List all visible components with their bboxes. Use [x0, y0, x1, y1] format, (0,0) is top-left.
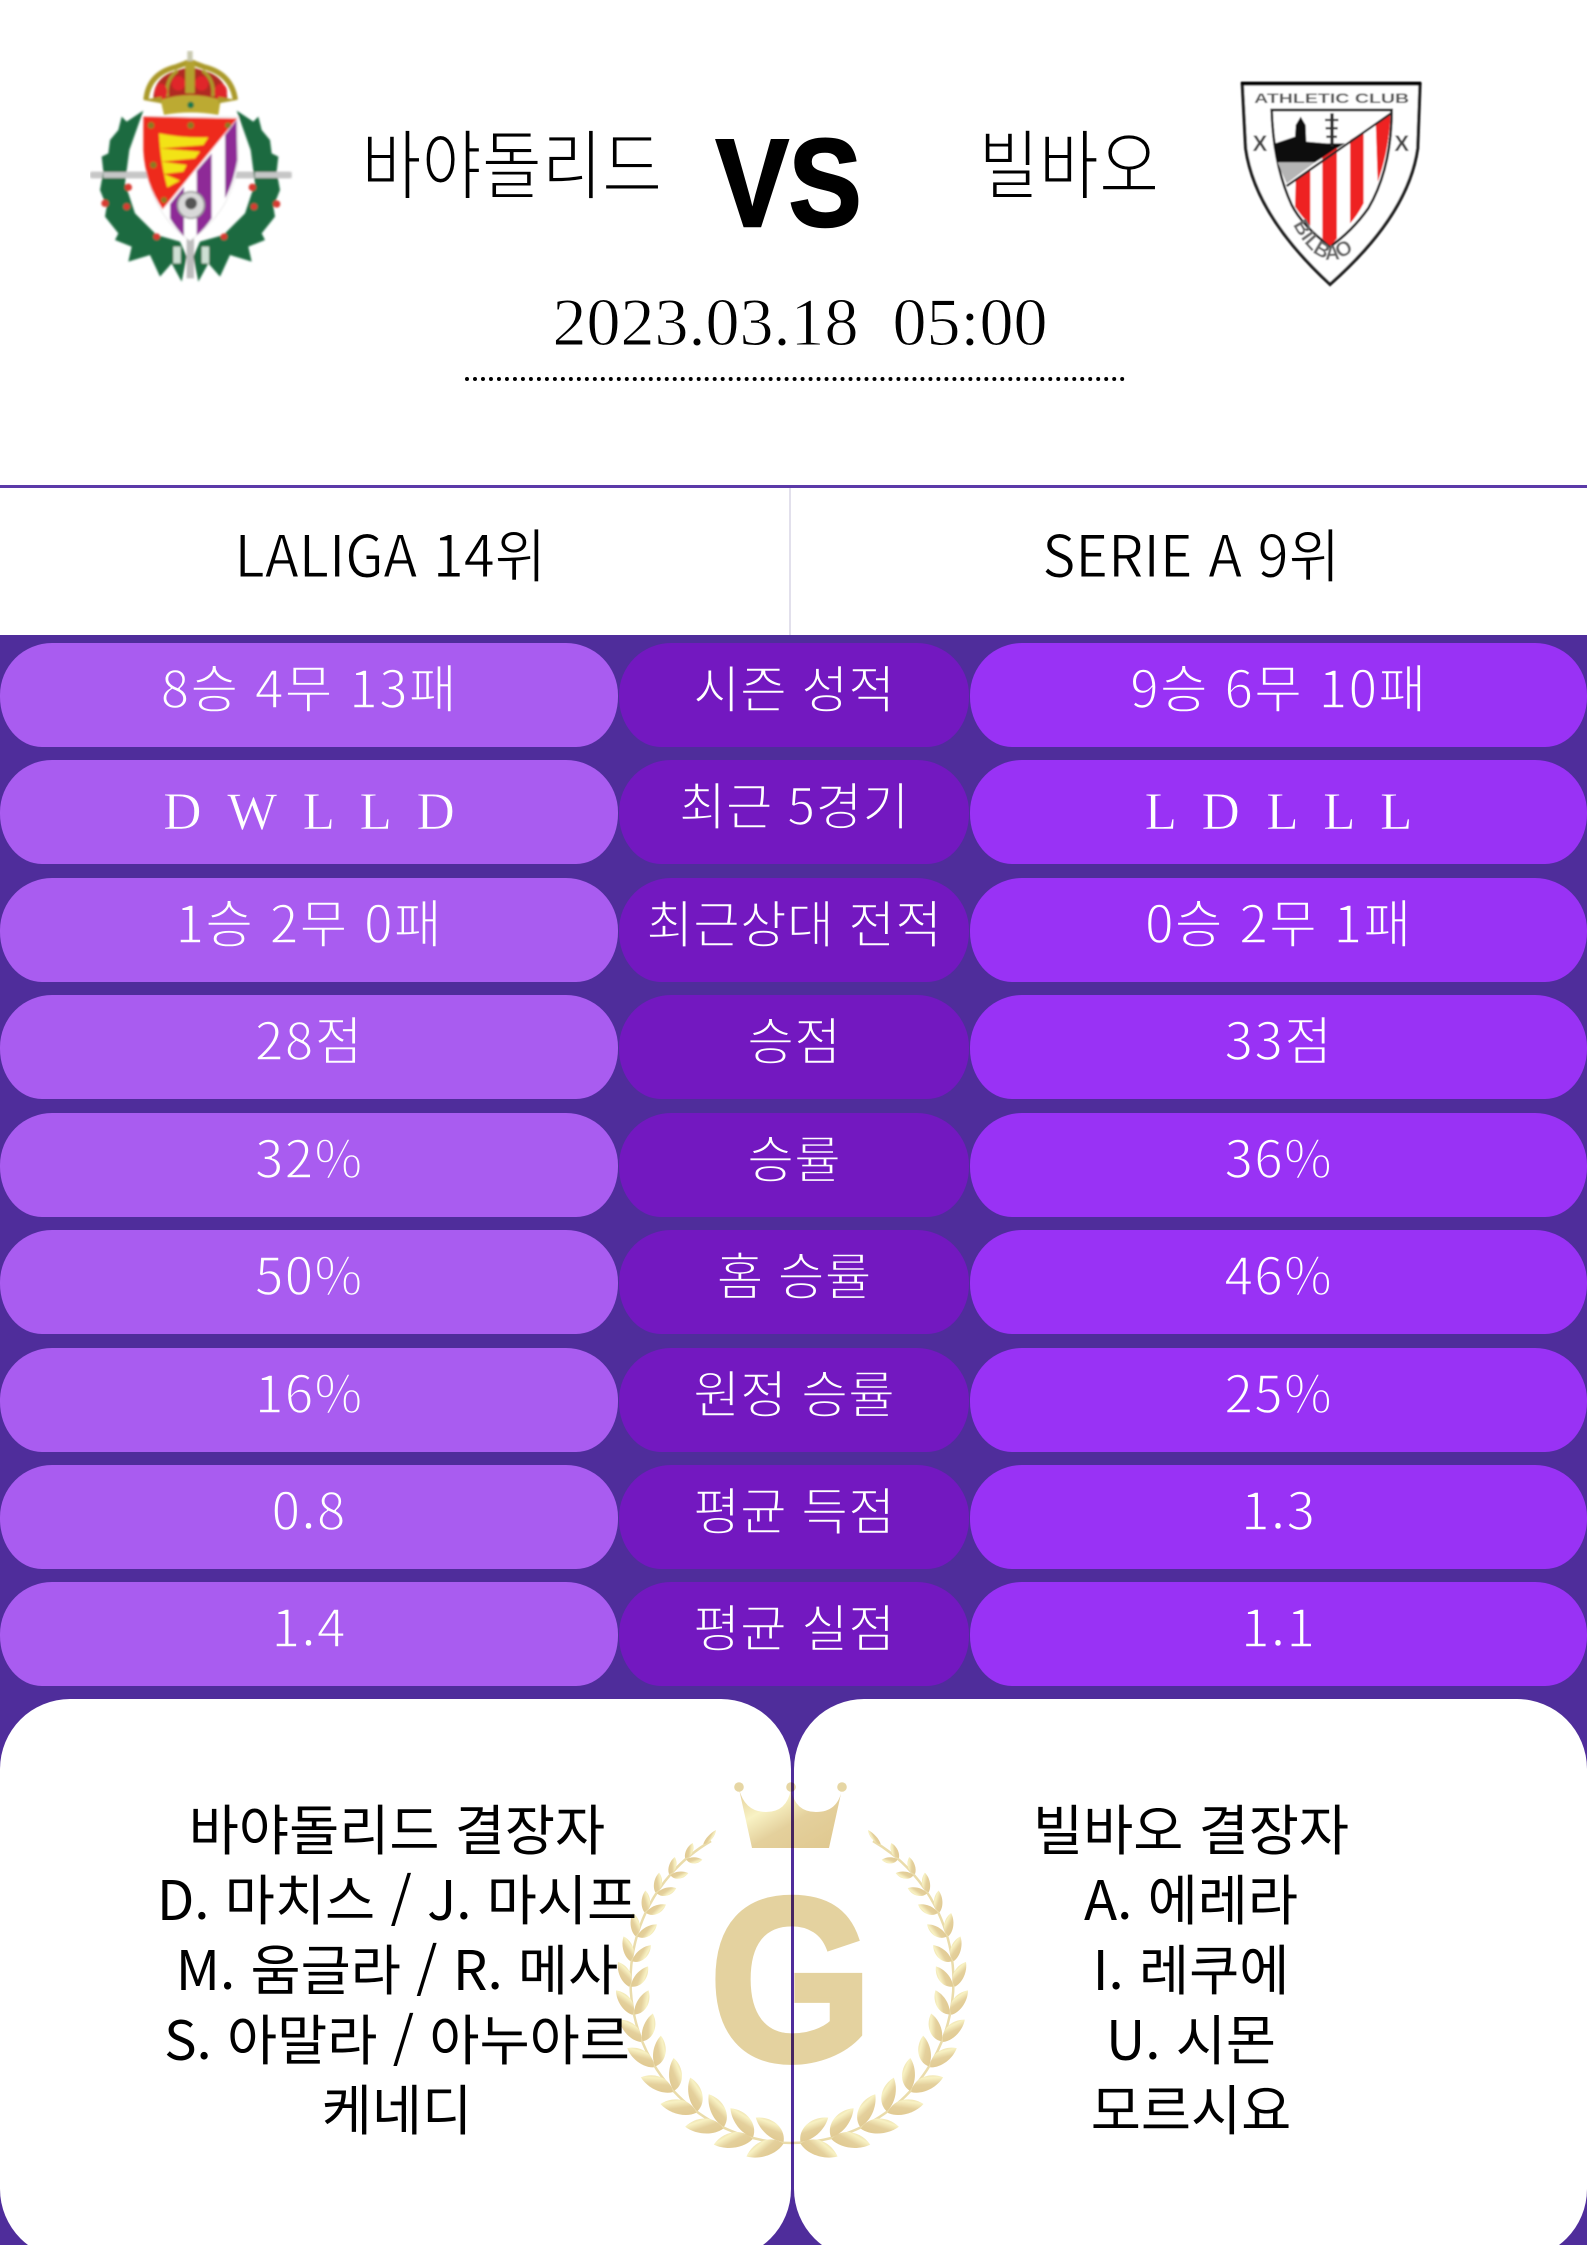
row label: home win rate: 홈 승률	[716, 1236, 872, 1310]
panel: Valladolid absentees	[0, 1699, 791, 2245]
row: goals against, Valladolid: 1.4	[271, 1587, 347, 1662]
icon: Athletic Club crest: BILBAO	[1293, 218, 1352, 261]
row: season record, Valladolid: 8승 4무 13패	[160, 648, 458, 723]
icon: Real Valladolid crest	[90, 50, 293, 282]
row: head to head, Valladolid	[0, 878, 618, 982]
icon: Athletic Club crest: X	[1253, 131, 1268, 156]
row label: points: 승점	[747, 1001, 841, 1075]
VS heading: VS	[716, 115, 862, 253]
wreath: left half	[611, 1828, 792, 2164]
team name: Valladolid: 바야돌리드	[362, 105, 662, 215]
crown	[734, 1782, 847, 1848]
row: points, Bilbao: 33점	[1224, 1000, 1333, 1075]
row: last five, Valladolid	[0, 760, 618, 864]
row: goals for, Bilbao	[970, 1465, 1587, 1569]
league rank: Bilbao: SERIE A 9위	[1042, 510, 1340, 594]
row: points, Valladolid	[0, 995, 618, 1099]
row: points, Bilbao	[970, 995, 1587, 1099]
row label: away win rate: 원정 승률	[693, 1354, 895, 1428]
row: goals against, Bilbao: 1.1	[1241, 1587, 1316, 1662]
row label: win rate: 승률	[747, 1119, 841, 1193]
row: win rate, Bilbao	[970, 1113, 1587, 1217]
wreath: right half	[792, 1828, 973, 2164]
letter G: G	[709, 1850, 873, 2110]
row: head to head, Bilbao	[970, 878, 1587, 982]
row: season record, Valladolid	[0, 643, 618, 747]
row: goals for, Valladolid: 0.8	[271, 1470, 347, 1545]
text: Valladolid absentee list: 바야돌리드 결장자 D. 마치스 / J. 마시프 M. 움글라 / R. 메사 S. 아말라 / 아누아르 케네디	[157, 1787, 637, 2146]
row: goals for, Valladolid	[0, 1465, 618, 1569]
icon: Athletic Club crest	[1240, 80, 1423, 288]
row label: last five	[619, 760, 969, 864]
row: home win rate, Valladolid: 50%	[255, 1235, 363, 1310]
row label: win rate	[619, 1113, 969, 1217]
row: season record, Bilbao	[970, 643, 1587, 747]
row: home win rate, Bilbao: 46%	[1224, 1235, 1333, 1310]
row: away win rate, Bilbao: 25%	[1224, 1353, 1333, 1428]
row: win rate, Valladolid: 32%	[255, 1118, 363, 1193]
row label: goals for: 평균 득점	[693, 1471, 895, 1545]
row: last five, Bilbao: L D L L L	[1145, 783, 1412, 841]
row: head to head, Valladolid: 1승 2무 0패	[175, 883, 443, 958]
row: away win rate, Valladolid: 16%	[255, 1353, 363, 1428]
row label: season record	[619, 643, 969, 747]
row label: head to head: 최근상대 전적	[646, 884, 942, 958]
row: goals against, Bilbao	[970, 1582, 1587, 1686]
row: goals for, Bilbao: 1.3	[1241, 1470, 1316, 1545]
league rank: Valladolid: LALIGA 14위	[234, 510, 546, 594]
row: home win rate, Valladolid	[0, 1230, 618, 1334]
row label: points	[619, 995, 969, 1099]
row: win rate, Valladolid	[0, 1113, 618, 1217]
row label: season record: 시즌 성적	[693, 649, 895, 723]
icon: Athletic Club crest: X	[1394, 131, 1409, 156]
row label: goals against	[619, 1582, 969, 1686]
row: home win rate, Bilbao	[970, 1230, 1587, 1334]
row: win rate, Bilbao: 36%	[1224, 1118, 1333, 1193]
vertical divider in rank row	[789, 488, 791, 635]
row label: last five: 최근 5경기	[679, 766, 909, 840]
league rank row	[0, 485, 1587, 635]
row: head to head, Bilbao: 0승 2무 1패	[1145, 883, 1412, 958]
row: last five, Valladolid: D W L L D	[163, 783, 455, 841]
row label: home win rate	[619, 1230, 969, 1334]
row label: goals for	[619, 1465, 969, 1569]
row: goals against, Valladolid	[0, 1582, 618, 1686]
row label: head to head	[619, 878, 969, 982]
row: points, Valladolid: 28점	[255, 1000, 363, 1075]
row label: goals against: 평균 실점	[693, 1588, 895, 1662]
match date and time: 2023.03.18 05:00	[553, 284, 1047, 360]
row: last five, Bilbao	[970, 760, 1587, 864]
text: Bilbao absentee list: 빌바오 결장자 A. 에레라 I. 레쿠에 U. 시몬 모르시요	[1033, 1787, 1349, 2146]
row label: away win rate	[619, 1348, 969, 1452]
row: away win rate, Bilbao	[970, 1348, 1587, 1452]
team name: Bilbao: 빌바오	[979, 105, 1159, 215]
row: away win rate, Valladolid	[0, 1348, 618, 1452]
icon: Athletic Club crest: ATHLETIC CLUB	[1254, 90, 1409, 106]
row: season record, Bilbao: 9승 6무 10패	[1130, 648, 1427, 723]
dotted divider	[465, 377, 1125, 381]
stats table background	[0, 635, 1587, 2245]
panel: Bilbao absentees	[794, 1699, 1587, 2245]
